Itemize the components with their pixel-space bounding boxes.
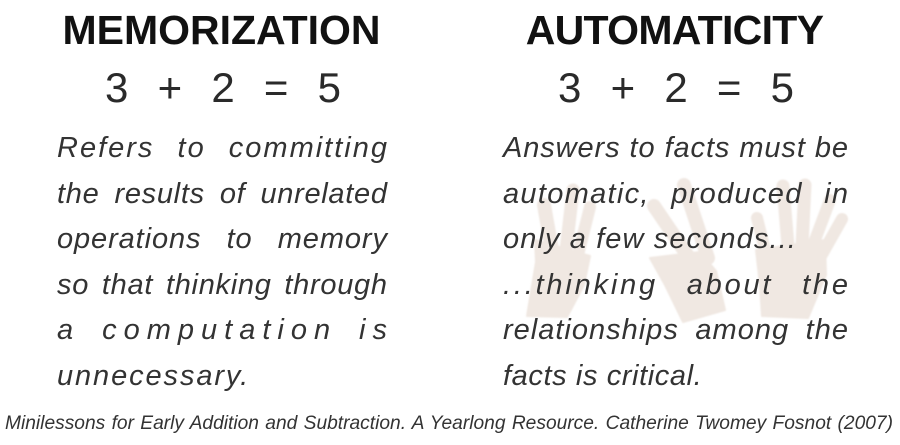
heading: automaticity: AUTOMATICITY	[526, 7, 823, 53]
citation: Minilessons for Early Addition and Subtraction. A Yearlong Resource. Catherine Twomey Fosnot (2007)	[5, 413, 893, 434]
text block: automaticity definition: automatic, produced in	[503, 178, 849, 210]
icon: hand showing two fingers	[650, 185, 725, 322]
text block: automaticity definition: facts is critical.	[503, 360, 702, 392]
equation: memorization: 3 + 2 = 5	[105, 64, 341, 111]
text block: memorization definition: a computation is	[57, 314, 394, 346]
icon: open hand showing five fingers	[756, 185, 842, 318]
text block: memorization definition: the results of unrelated	[57, 178, 388, 210]
text block: memorization definition: Refers to committing	[57, 132, 389, 164]
text block: memorization definition	[57, 132, 394, 392]
text block: automaticity definition	[502, 132, 851, 392]
equation: automaticity: 3 + 2 = 5	[558, 64, 794, 111]
text block: automaticity definition: only a few seconds...	[503, 223, 797, 255]
text block: memorization definition: so that thinking through	[57, 268, 388, 300]
text block: automaticity definition: relationships among the	[503, 314, 849, 346]
text block: automaticity definition: ...thinking about the	[503, 268, 851, 300]
icon: hand showing three fingers	[527, 190, 590, 317]
text block: automaticity definition: Answers to facts must be	[503, 132, 849, 164]
text block: memorization definition: operations to memory	[57, 223, 388, 255]
text block: memorization definition: unnecessary.	[57, 360, 250, 392]
heading: memorization: MEMORIZATION	[62, 7, 381, 53]
